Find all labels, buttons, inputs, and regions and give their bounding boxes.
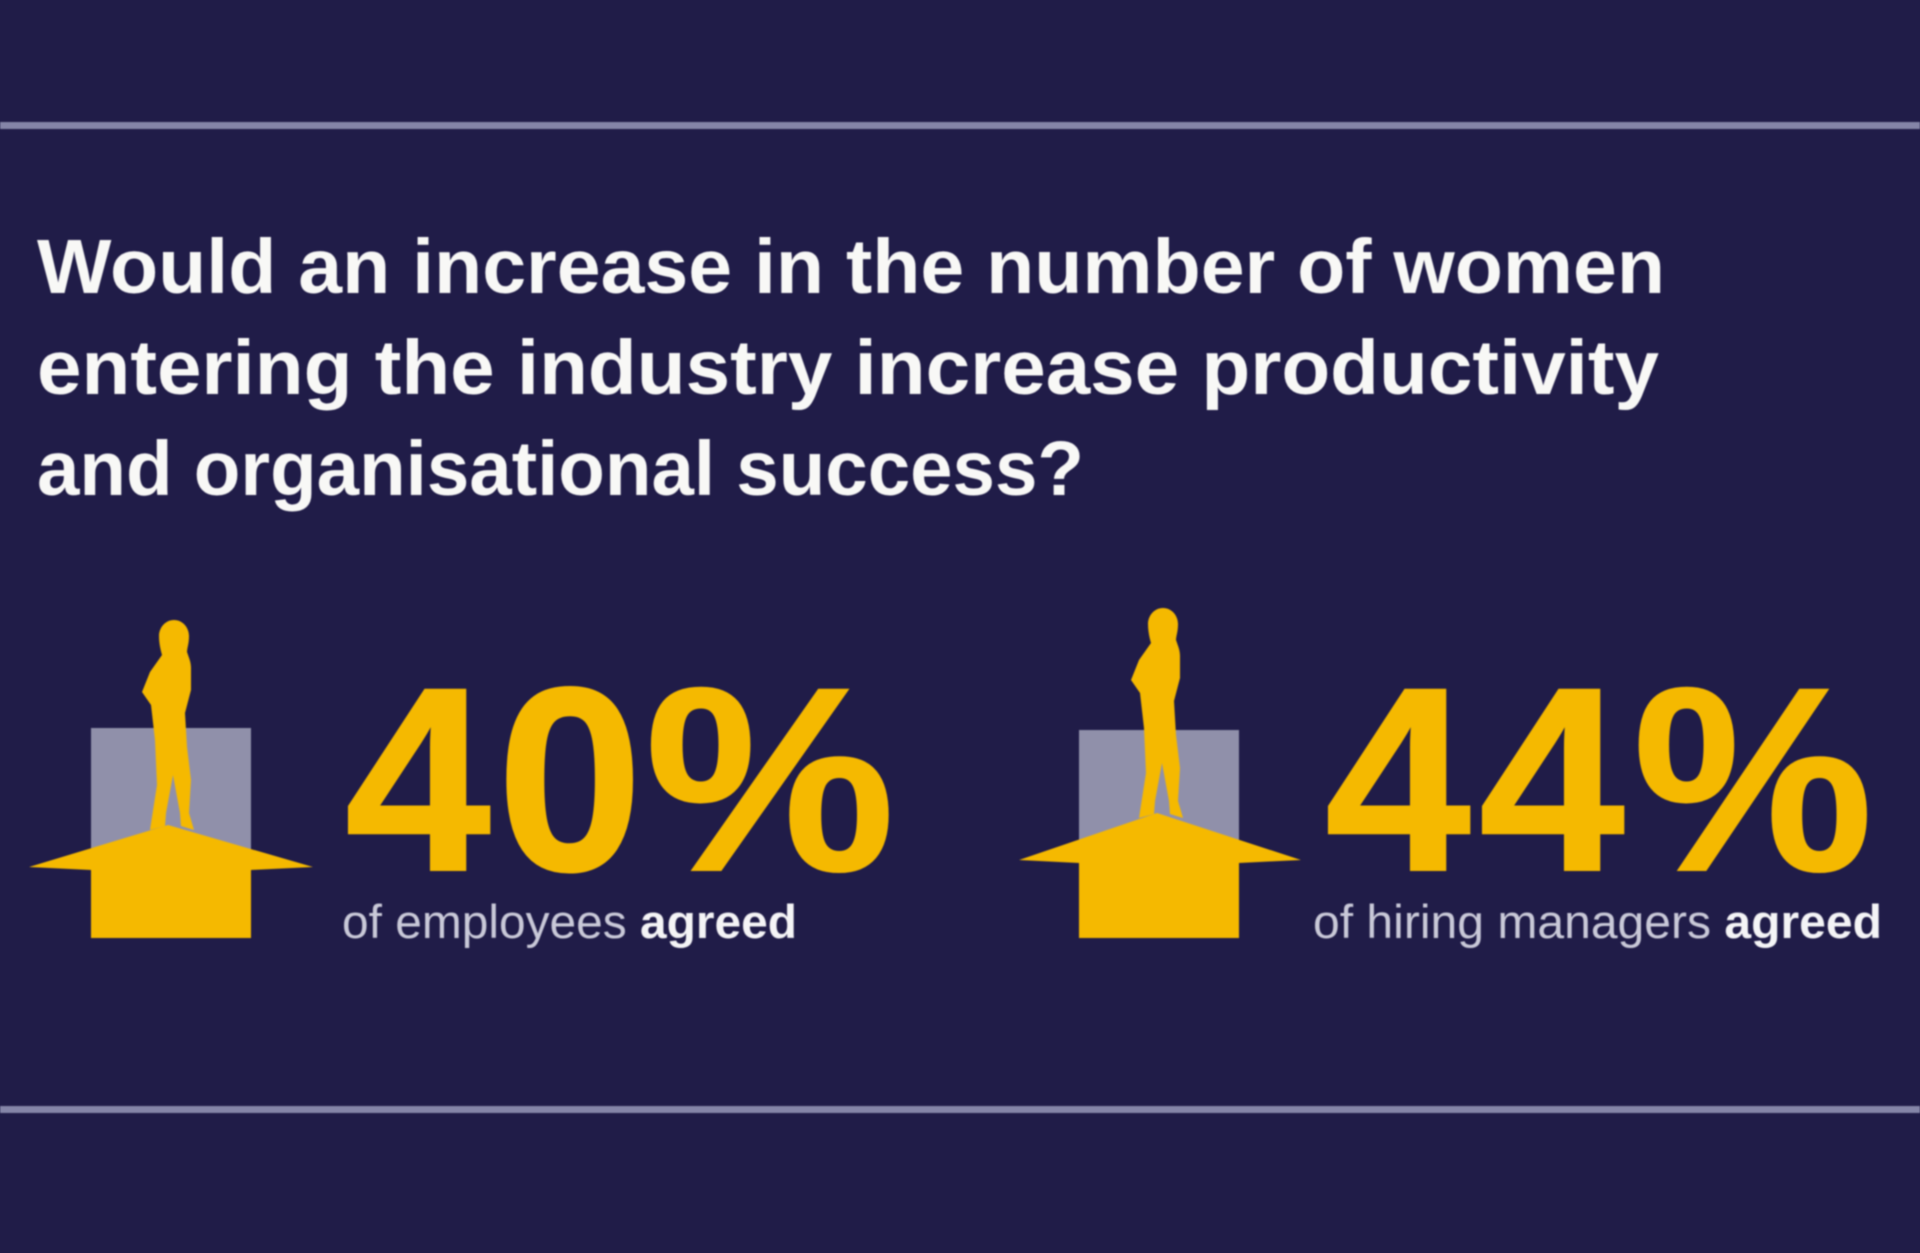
stat: 40%: 40: [345, 633, 643, 926]
caption: employees: of employees agreed: [342, 895, 797, 948]
icon: woman standing on rising arrow, hiring managers: [1019, 608, 1301, 938]
heading: Would an increase in the number of women: [37, 224, 1665, 310]
stat: 44%: [1325, 633, 1873, 926]
panel: employees: [29, 620, 895, 948]
heading: [37, 224, 1665, 512]
heading: entering the industry increase productivity: [37, 325, 1659, 411]
icon: woman standing on rising arrow, employees: [29, 620, 313, 938]
stat: 40%: [345, 633, 895, 926]
caption: hiring managers: of hiring managers agreed: [1313, 895, 1882, 948]
stat: 44%: %: [1633, 633, 1873, 926]
stat: 40%: %: [645, 633, 895, 926]
heading: and organisational success?: [37, 426, 1084, 512]
panel: hiring managers: [1019, 608, 1882, 948]
stat: 44%: 44: [1325, 633, 1626, 926]
